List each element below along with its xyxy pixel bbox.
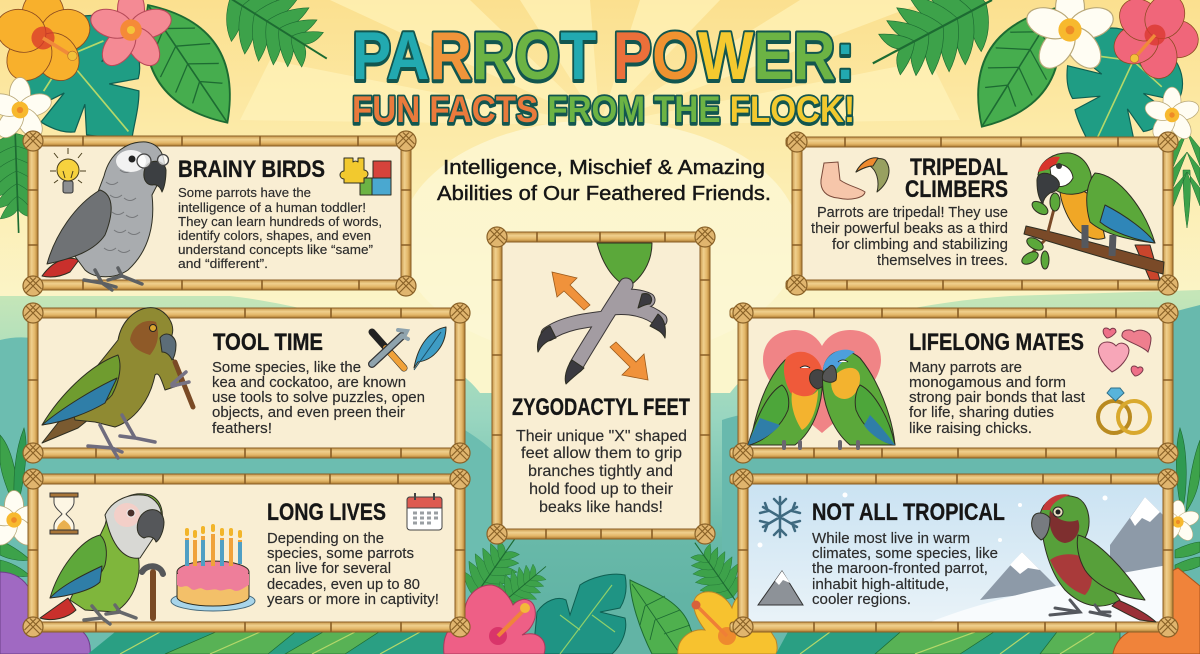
body text: cooler regions. <box>812 592 911 608</box>
foliage: bottom strip left <box>88 628 450 654</box>
body text: years or more in captivity! <box>267 592 439 608</box>
foliage: top left <box>0 0 348 234</box>
body text <box>812 531 998 608</box>
arrow: up-left <box>552 272 590 310</box>
intro text: Intelligence, Mischief & Amazing <box>443 157 765 179</box>
body text: kea and cockatoo, are known <box>212 375 406 391</box>
foliage: top right <box>852 0 1200 228</box>
illustration: snowy mountains <box>758 492 1168 622</box>
heading: BRAINY BIRDS <box>178 156 325 183</box>
foliage: bottom left edge <box>0 428 90 654</box>
icon: hearts <box>1098 328 1151 376</box>
body text: strong pair bonds that last <box>909 390 1085 406</box>
body text <box>267 531 439 608</box>
body text: for climbing and stabilizing <box>832 237 1008 253</box>
title: PARROT POWER: <box>352 18 855 94</box>
arrow: down-right <box>610 342 648 380</box>
icon: wedding rings <box>1098 388 1150 433</box>
parrots: pair of lovebirds <box>748 350 895 448</box>
icon: snowflake <box>760 497 800 537</box>
body text: the maroon-fronted parrot, <box>812 561 988 577</box>
parrot: maroon-fronted <box>1032 494 1156 622</box>
parrot: african grey <box>42 142 168 290</box>
body text: themselves in trees. <box>877 253 1008 269</box>
icon: light bulb <box>50 148 86 193</box>
title <box>352 18 855 130</box>
body text: Some species, like the <box>212 360 361 376</box>
intro text: Abilities of Our Feathered Friends. <box>437 183 771 205</box>
body text: intelligence of a human toddler! <box>178 200 366 215</box>
icon: birthday cake <box>171 526 255 611</box>
body text: hold food up to their <box>529 481 674 498</box>
background: green and teal hills <box>0 290 1200 654</box>
body text: monogamous and form <box>909 375 1066 391</box>
heading line two: CLIMBERS <box>905 176 1008 203</box>
body text: They can learn hundreds of words, <box>178 214 382 229</box>
body text <box>178 185 382 271</box>
parrot: macaw on branch <box>1020 153 1164 280</box>
panel: tool time <box>23 303 470 463</box>
panel: lifelong mates <box>730 303 1178 463</box>
panel: long lives <box>23 469 470 637</box>
body text: for life, sharing duties <box>909 405 1054 421</box>
body text: like raising chicks. <box>909 421 1032 437</box>
panel: tripedal climbers <box>786 132 1178 295</box>
body text <box>516 428 687 516</box>
body text: Many parrots are <box>909 360 1022 376</box>
body text <box>212 360 425 437</box>
intro text <box>437 157 771 205</box>
foliage: bottom centre <box>444 524 777 654</box>
icon: toucan beak <box>856 158 889 192</box>
icon: puzzle <box>340 158 391 195</box>
body text <box>909 360 1085 437</box>
body text: Their unique "X" shaped <box>516 428 687 445</box>
body text: climates, some species, like <box>812 546 998 562</box>
heading: LONG LIVES <box>267 499 386 526</box>
heading: TOOL TIME <box>213 329 323 356</box>
body text: feathers! <box>212 421 272 437</box>
heading: TRIPEDAL <box>910 154 1008 181</box>
heading: ZYGODACTYL FEET <box>512 394 690 421</box>
icon: calendar <box>407 493 442 530</box>
body text: decades, even up to 80 <box>267 577 420 593</box>
body text: branches tightly and <box>528 463 673 480</box>
foliage: bottom strip right <box>776 428 1200 654</box>
body text: their powerful beaks as a third <box>811 221 1008 237</box>
body text: Some parrots have the <box>178 185 311 200</box>
body text <box>811 205 1008 269</box>
parrot: old parrot with cane <box>40 494 164 624</box>
icon: wrench and screwdriver <box>372 330 408 368</box>
body text: and “different”. <box>178 256 268 271</box>
icon: human foot <box>821 162 865 199</box>
body text: understand concepts like “same” <box>178 242 373 257</box>
body text: While most live in warm <box>812 531 970 547</box>
panel: zygodactyl feet <box>487 227 715 544</box>
heading: LIFELONG MATES <box>909 329 1084 356</box>
panel: not all tropical <box>730 469 1178 637</box>
body text: can live for several <box>267 561 391 577</box>
body text: species, some parrots <box>267 546 414 562</box>
illustration: parrot foot <box>538 243 665 384</box>
body text: inhabit high-altitude, <box>812 577 949 593</box>
icon: feather <box>414 327 446 370</box>
body text: feet allow them to grip <box>521 445 682 462</box>
body text: objects, and even preen their <box>212 405 405 421</box>
heading: NOT ALL TROPICAL <box>812 499 1005 526</box>
title: FUN FACTS FROM THE FLOCK! <box>352 89 855 130</box>
parrot: kea with stick <box>42 308 193 458</box>
panel: brainy birds <box>23 131 416 296</box>
illustration: big heart <box>763 330 881 433</box>
icon: hourglass <box>50 493 78 534</box>
body text: use tools to solve puzzles, open <box>212 390 425 406</box>
icon: small mountain <box>758 571 803 605</box>
body text: Depending on the <box>267 531 384 547</box>
body text: beaks like hands! <box>539 499 663 516</box>
body text: Parrots are tripedal! They use <box>817 205 1008 221</box>
body text: identify colors, shapes, and even <box>178 228 371 243</box>
